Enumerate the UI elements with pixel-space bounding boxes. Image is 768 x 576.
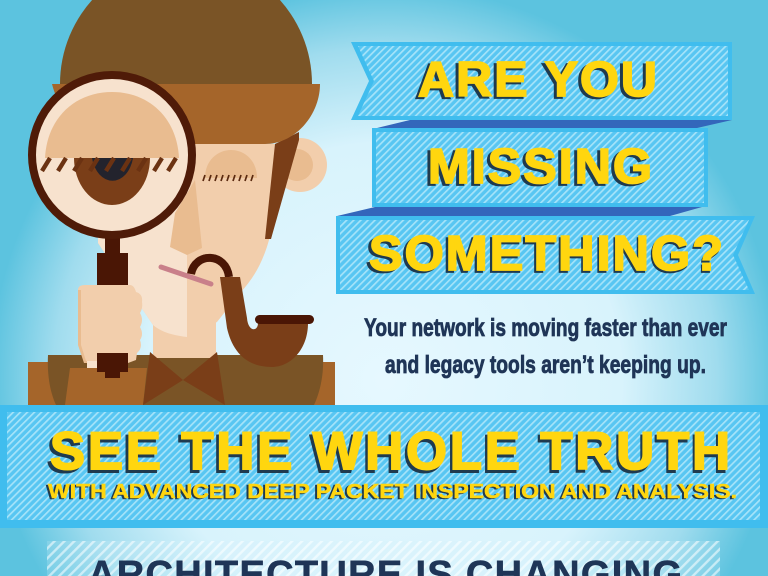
banner: see the whole truth: WITH ADVANCED DEEP PACKET INSPECTION AND ANALYSIS. — [46, 482, 735, 504]
banner: are you: ARE YOU — [415, 55, 656, 109]
neck — [153, 310, 216, 358]
magnifying glass handle — [97, 235, 128, 287]
banner: are you — [351, 42, 732, 120]
pipe — [191, 258, 314, 367]
banner: see the whole truth: WITH ADVANCED DEEP PACKET INSPECTION AND ANALYSIS. — [48, 481, 737, 503]
jacket — [28, 355, 335, 405]
banner: missing: MISSING — [425, 142, 651, 196]
hand — [78, 285, 142, 368]
banner: something: SOMETHING? — [369, 227, 725, 281]
panel: architecture is changing — [47, 541, 720, 576]
banner: something — [336, 216, 755, 294]
illustration: detective — [28, 0, 335, 405]
subheading text — [364, 314, 727, 379]
ear — [273, 138, 327, 192]
right eye — [203, 150, 257, 181]
magnifying glass handle end — [97, 353, 128, 378]
banner: missing — [372, 128, 708, 207]
banner: see the whole truth: SEE THE WHOLE TRUTH — [47, 425, 731, 484]
face — [98, 144, 275, 337]
banner: are you: ARE YOU — [418, 53, 659, 107]
banner: see the whole truth: SEE THE WHOLE TRUTH — [50, 422, 733, 481]
bow tie — [143, 352, 225, 405]
magnifying glass lens — [32, 75, 192, 235]
banner: something: SOMETHING? — [366, 229, 724, 283]
pink mouth — [161, 267, 211, 284]
hat — [52, 0, 320, 144]
ribbon connectors — [337, 120, 732, 216]
banner: missing: MISSING — [428, 140, 654, 194]
banner: see the whole truth — [0, 405, 768, 528]
hair sideburn — [265, 132, 299, 239]
